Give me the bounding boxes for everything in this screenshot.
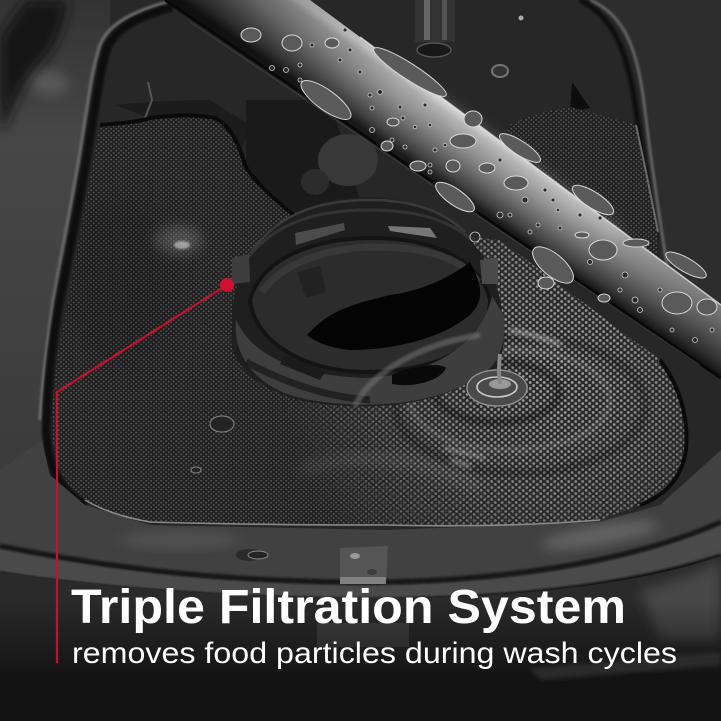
- filter mesh screen: [52, 114, 688, 527]
- inner bowl: [250, 238, 490, 372]
- right side wall: [590, 0, 721, 370]
- callout marker dot: [220, 278, 234, 292]
- inner sump recess details: [115, 0, 590, 215]
- small water droplets: [270, 28, 714, 342]
- droplets on mesh: [191, 416, 268, 559]
- ring slots reflecting mesh: [295, 223, 345, 245]
- upper right mesh piece: [500, 107, 658, 262]
- spray arm: [165, 0, 721, 378]
- lower tub fold: [0, 522, 721, 721]
- metal clip: [340, 546, 388, 584]
- recess: [42, 0, 721, 535]
- dark water in bowl: [307, 262, 480, 350]
- subtitle: removes food particles during wash cycles: [72, 637, 677, 670]
- callout leader line: [57, 278, 234, 663]
- title: Triple Filtration System: [71, 581, 626, 634]
- left rim highlight: [40, 2, 168, 420]
- lower tub band: [0, 440, 721, 585]
- ring outer body: [231, 197, 503, 406]
- water stream and splash: [466, 354, 528, 407]
- large water beads: [241, 28, 717, 315]
- ring tabs: [232, 254, 250, 284]
- filter ring assembly: [231, 197, 504, 406]
- front rim: [236, 296, 504, 405]
- water ripples on mesh: [395, 330, 645, 473]
